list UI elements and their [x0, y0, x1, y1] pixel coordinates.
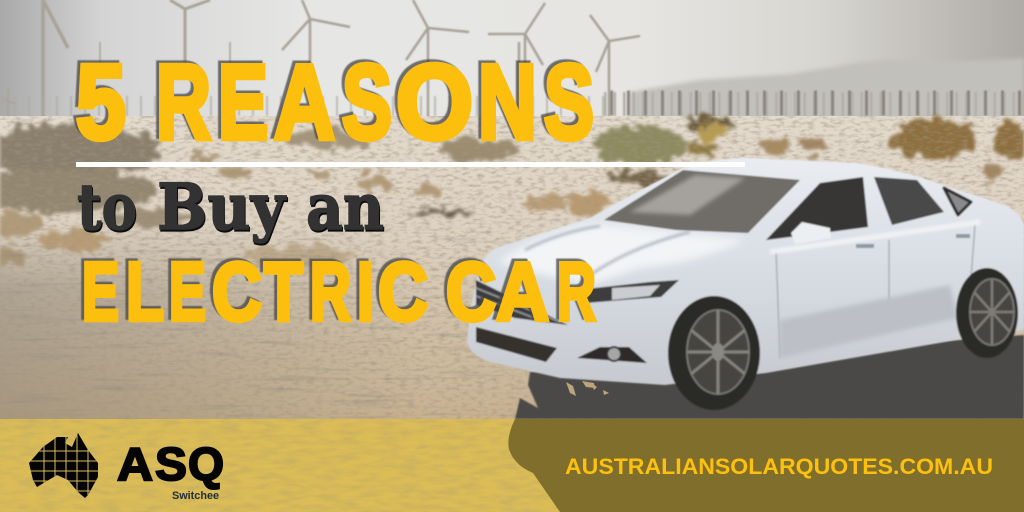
logo wordmark — [117, 438, 224, 490]
title line 3: ELECTRIC CAR: E — [169, 245, 206, 338]
title line 3: ELECTRIC CAR: I — [357, 245, 374, 338]
desert bushes — [0, 115, 1024, 269]
side mirror — [791, 222, 831, 244]
title line 1: 5 REASONS: 5 — [76, 44, 126, 162]
title line 1: 5 REASONS: S — [342, 44, 392, 162]
logo wordmark: Q — [188, 438, 224, 490]
shoulder highlight — [770, 222, 980, 252]
hood crease — [525, 226, 690, 283]
sunlit patches in shadow — [566, 381, 609, 396]
title line 3: ELECTRIC CAR: C — [446, 245, 496, 338]
car body — [467, 158, 1024, 385]
distant mountains — [630, 58, 1024, 125]
hood highlight — [498, 224, 745, 285]
windshield — [604, 170, 800, 233]
ground grain — [0, 116, 1024, 420]
upper grille — [476, 280, 568, 325]
title line 1: 5 REASONS: A — [274, 44, 335, 162]
wind turbines — [0, 0, 640, 125]
door seams — [776, 225, 975, 358]
icon: solar-grid Australia — [29, 433, 98, 498]
title line 1: 5 REASONS: O — [396, 44, 473, 162]
title line 3: ELECTRIC CAR: L — [126, 245, 164, 338]
car shadow on banner — [508, 419, 1024, 512]
headlight — [586, 280, 679, 303]
title line 1: 5 REASONS: S — [544, 44, 594, 162]
quarter window — [944, 188, 971, 215]
powered by Switchee: Switchee — [172, 490, 219, 502]
title line 3: ELECTRIC CAR: R — [310, 245, 351, 338]
door handles — [856, 236, 970, 246]
title line 3: ELECTRIC CAR: A — [496, 245, 549, 338]
logo wordmark: S — [155, 438, 187, 490]
logo wordmark: A — [117, 438, 153, 490]
title line 2: to Buy an: to — [77, 170, 137, 245]
title line 3: ELECTRIC CAR: R — [557, 245, 596, 338]
fog lamp — [577, 347, 647, 363]
title line 1: 5 REASONS: N — [478, 44, 537, 162]
tyre track streaks — [0, 230, 560, 420]
title line 3: ELECTRIC CAR: C — [378, 245, 428, 338]
title line 3: ELECTRIC CAR: E — [82, 245, 119, 338]
divider line — [76, 162, 745, 167]
logo: ASQ Australia map — [29, 433, 224, 499]
bottom banner — [0, 419, 1024, 512]
title line 2: to Buy an: Buy — [157, 170, 287, 245]
title line 3: ELECTRIC CAR: C — [212, 245, 262, 338]
distant turbine rows — [0, 103, 1024, 106]
road shadow under car — [515, 335, 1024, 419]
title line 2: to Buy an — [77, 170, 384, 245]
website url: AUSTRALIANSOLARQUOTES.COM.AU — [565, 454, 993, 479]
title line 2: to Buy an: an — [306, 170, 384, 245]
ground — [0, 116, 1024, 420]
title line 1: 5 REASONS: E — [218, 44, 268, 162]
title line 1: 5 REASONS: R — [156, 44, 211, 162]
title line 3: ELECTRIC CAR — [82, 245, 596, 338]
rear side window — [874, 177, 944, 225]
door lower reflection — [780, 285, 958, 358]
title line 3: ELECTRIC CAR: T — [264, 245, 303, 338]
lower grille — [476, 327, 557, 362]
title line 1: 5 REASONS — [76, 44, 594, 162]
car — [467, 158, 1024, 410]
front side window — [766, 177, 868, 240]
rear wheel — [956, 268, 1018, 358]
front wheel — [668, 296, 760, 410]
